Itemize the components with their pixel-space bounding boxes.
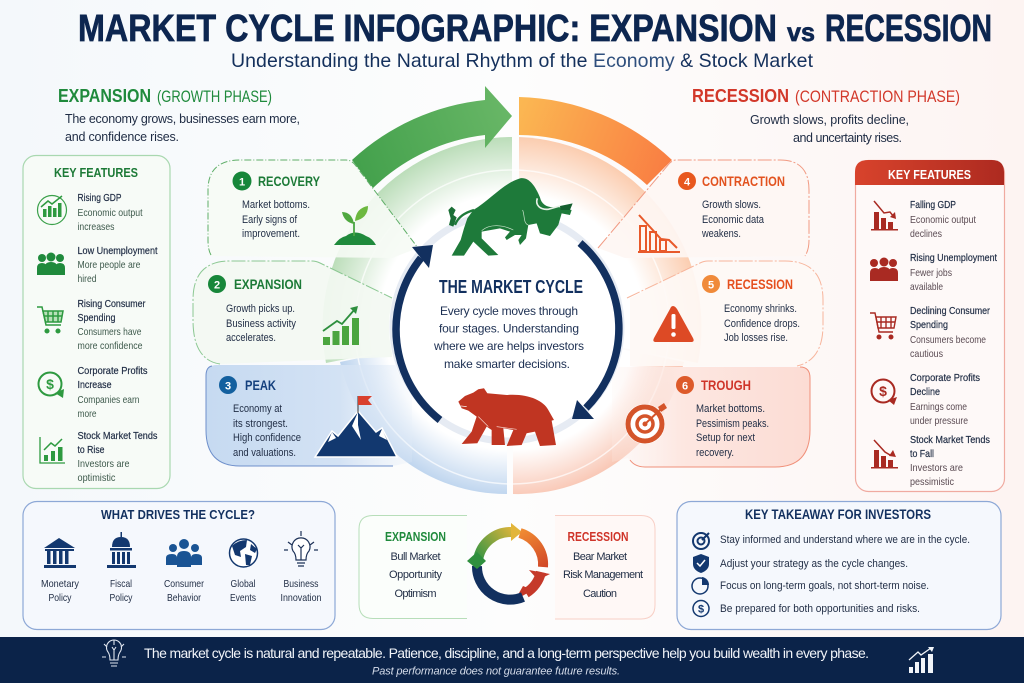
text: rising unemployment	[910, 252, 997, 293]
text: corporate profits decline: Corporate Profits	[910, 372, 980, 384]
text: recession body: Economy shrinks.	[724, 303, 797, 315]
text: falling gdp: Economic output	[910, 214, 976, 226]
icon: target	[625, 403, 667, 444]
icon: dollar coin	[693, 600, 709, 616]
text: corporate profits increase	[78, 365, 148, 420]
arc: orange contraction band	[519, 97, 672, 185]
icon: footer chart	[909, 647, 934, 673]
icon: globe	[230, 539, 258, 567]
subtitle: Understanding the Natural Rhythm of the Economy & Stock Market	[231, 50, 814, 72]
icon: footer lightbulb	[102, 640, 126, 666]
text: recession body: Confidence drops.	[724, 318, 800, 330]
heading: expansion phase: (GROWTH PHASE)	[157, 88, 272, 106]
icon: people	[870, 258, 898, 281]
panel: expansion vs recession summary	[359, 516, 655, 619]
text: be prepared: Be prepared for both opportunities and risks.	[720, 603, 920, 615]
panel: recovery card	[208, 160, 418, 258]
icon: warning triangle	[653, 306, 694, 342]
text: rising gdp: increases	[78, 221, 114, 233]
center disc	[389, 209, 625, 445]
text: consumer behavior	[164, 578, 204, 604]
text: market cycle description: make smarter decisions.	[444, 357, 570, 371]
text: rising gdp	[78, 192, 143, 233]
badge: 5	[702, 275, 720, 293]
icon: mountain with flag	[315, 396, 397, 457]
text: global events: Global	[230, 578, 256, 590]
text: declining consumer spending: Declining Consumer	[910, 305, 990, 317]
icon: shield	[693, 554, 709, 573]
text: stock market fall	[910, 434, 990, 488]
text: business innovation: Business	[284, 578, 318, 590]
icon: rising gdp	[38, 196, 66, 224]
panel: recession card	[627, 261, 823, 366]
icon: consumers	[166, 539, 202, 567]
text: consumer behavior: Behavior	[167, 592, 201, 604]
badge: 1	[232, 172, 252, 190]
text: fiscal policy	[110, 578, 133, 604]
text: rising gdp: Rising GDP	[78, 192, 122, 204]
panel: key features recession	[855, 160, 1004, 492]
heading: recession phase: (CONTRACTION PHASE)	[795, 88, 960, 106]
text: stock market rise: optimistic	[78, 472, 116, 484]
text: expansion body: Growth picks up.	[226, 303, 295, 315]
icon: falling gdp	[871, 201, 898, 230]
badge: 6	[676, 376, 694, 394]
text: declining consumer spending: Spending	[910, 319, 948, 331]
heading: trough: TROUGH	[701, 377, 751, 393]
wheel: fading wedges	[323, 137, 701, 494]
text: stock market rise: Investors are	[78, 458, 130, 470]
text: rising consumer spending: Consumers have	[78, 326, 142, 338]
text: recession description	[750, 113, 909, 145]
text: expansion column: Opportunity	[389, 569, 442, 581]
text: rising consumer spending	[78, 298, 146, 352]
icon: people	[37, 252, 65, 275]
badge: 3: 3	[225, 380, 231, 392]
text: recovery body: improvement.	[242, 228, 300, 240]
text: market cycle description: four stages. Understanding	[439, 322, 579, 336]
panel: key takeaway for investors	[677, 502, 1001, 630]
text: expansion column	[385, 529, 446, 600]
text: focus on goals: Focus on long-term goals, not short-term noise.	[720, 580, 929, 592]
text: peak body: and valuations.	[233, 447, 296, 459]
text: rising gdp: Economic output	[78, 207, 143, 219]
panel: contraction card	[598, 160, 809, 258]
text: peak body: Economy at	[233, 403, 282, 415]
text: consumer behavior: Consumer	[164, 578, 204, 590]
text: market cycle description: Every cycle moves through	[440, 304, 578, 318]
icon: cart	[870, 313, 896, 339]
text: recession column: Risk Management	[563, 569, 643, 581]
icon: bull	[448, 178, 573, 256]
heading: recession: RECESSION	[727, 276, 793, 292]
text: low unemployment: Low Unemployment	[78, 245, 158, 257]
badge: 3	[219, 376, 237, 394]
text: expansion column: EXPANSION	[385, 529, 446, 544]
badge: 6: 6	[682, 380, 688, 392]
text: recession column: RECESSION	[568, 529, 628, 544]
heading: expansion phase: EXPANSION	[58, 86, 151, 106]
icon: target	[693, 533, 709, 549]
icon: bank	[44, 538, 76, 568]
text: stock market fall: to Fall	[910, 448, 934, 460]
text: corporate profits increase: Corporate Profits	[78, 365, 148, 377]
badge: 4: 4	[684, 176, 691, 188]
text: low unemployment	[78, 245, 158, 285]
text: monetary policy: Policy	[48, 592, 72, 604]
text: expansion column: Bull Market	[390, 551, 440, 563]
title: vs	[787, 17, 815, 47]
text: recession column	[563, 529, 643, 600]
heading: expansion: EXPANSION	[234, 276, 302, 292]
title: MARKET CYCLE INFOGRAPHIC: EXPANSION	[78, 8, 777, 50]
badge: 1: 1	[239, 176, 245, 188]
text: recession body	[724, 303, 800, 344]
text: recovery body: Early signs of	[242, 214, 298, 226]
text: declining consumer spending	[910, 305, 990, 360]
icon: cycle arrows	[467, 523, 550, 600]
text: fiscal policy: Fiscal	[110, 578, 132, 590]
text: expansion description	[65, 112, 300, 144]
text: corporate profits decline	[910, 372, 980, 427]
text: trough body: recovery.	[696, 447, 734, 459]
heading: peak: PEAK	[245, 377, 276, 393]
text: recovery body: Market bottoms.	[242, 199, 310, 211]
text: declining consumer spending: Consumers become	[910, 334, 986, 346]
panel: trough card	[612, 367, 810, 467]
icon: cart	[37, 307, 63, 333]
text: stock market fall: Investors are	[910, 462, 963, 474]
text: expansion column: Optimism	[394, 588, 436, 600]
heading: key features: KEY FEATURES	[54, 165, 138, 180]
badge: 2	[208, 275, 226, 293]
text: peak body: High confidence	[233, 432, 301, 444]
text: peak body: its strongest.	[233, 418, 288, 430]
text: stay informed: Stay informed and understand where we are in the cycle.	[720, 534, 970, 546]
text: expansion body: Business activity	[226, 318, 297, 330]
heading: contraction: CONTRACTION	[702, 173, 785, 189]
badge: 4	[678, 172, 696, 190]
text: corporate profits decline: under pressure	[910, 415, 968, 427]
panel: peak card	[206, 365, 412, 466]
icon: dollar profits: $	[46, 376, 54, 392]
text: stock market fall: pessimistic	[910, 476, 954, 488]
text: recession description: and uncertainty rises.	[793, 131, 902, 145]
text: falling gdp: Falling GDP	[910, 199, 956, 211]
icon: lightbulb	[284, 531, 318, 566]
text: trough body: Setup for next	[696, 432, 755, 444]
text: rising consumer spending: Rising Consumer	[78, 298, 146, 310]
text: monetary policy	[41, 578, 80, 604]
icon: dollar profits	[38, 372, 64, 398]
text: recession column: Caution	[583, 588, 617, 600]
text: stock market fall: Stock Market Tends	[910, 434, 990, 446]
icon: dollar coin: $	[698, 604, 704, 616]
text: expansion description: The economy grows, businesses earn more,	[65, 112, 300, 126]
text: trough body: Pessimism peaks.	[696, 418, 769, 430]
panel: key features expansion	[23, 156, 170, 488]
text: rising unemployment: Rising Unemployment	[910, 252, 997, 264]
text: expansion body	[226, 303, 297, 344]
panel: expansion card	[193, 261, 392, 364]
icon: sprout	[334, 206, 376, 245]
footer banner	[0, 637, 1024, 683]
icon: dollar decline	[872, 380, 897, 405]
icon: pie chart	[692, 577, 709, 594]
text: corporate profits increase: more	[78, 408, 97, 420]
text: market cycle description: where we are helps investors	[433, 339, 584, 353]
text: adjust strategy: Adjust your strategy as the cycle changes.	[720, 558, 908, 570]
heading: recession phase: RECESSION	[692, 86, 789, 106]
text: footer message: The market cycle is natural and repeatable. Patience, discipline, and a long-term perspective help you build wealth in every phase.	[144, 645, 869, 661]
header: key features	[855, 160, 1004, 185]
heading: key takeaway: KEY TAKEAWAY FOR INVESTORS	[745, 507, 931, 522]
text: contraction body	[701, 199, 764, 240]
icon: capitol	[107, 532, 136, 568]
text: corporate profits decline: Earnings come	[910, 401, 967, 413]
text: expansion description: and confidence rises.	[65, 130, 179, 144]
icon: bear	[458, 388, 556, 446]
badge: 2: 2	[214, 280, 220, 292]
panel: what drives the cycle	[23, 502, 335, 630]
badge: 5: 5	[708, 280, 714, 292]
text: global events: Events	[230, 592, 256, 604]
icon: stock chart up	[40, 437, 65, 463]
icon: stock chart down	[871, 440, 898, 468]
text: rising consumer spending: Spending	[78, 312, 116, 324]
text: contraction body: weakens.	[701, 228, 741, 240]
text: business innovation	[280, 578, 322, 604]
text: global events	[230, 578, 256, 604]
text: contraction body: Economic data	[702, 214, 764, 226]
text: declining consumer spending: cautious	[910, 348, 943, 360]
text: falling gdp	[910, 199, 976, 240]
icon: growth chart	[323, 306, 359, 345]
text: monetary policy: Monetary	[41, 578, 80, 590]
ring: market cycle arrows	[393, 213, 621, 441]
heading: what drives the cycle: WHAT DRIVES THE CYCLE?	[101, 507, 255, 522]
text: rising unemployment: available	[910, 281, 943, 293]
text: recession description: Growth slows, profits decline,	[750, 113, 909, 127]
icon: dollar decline: $	[879, 383, 887, 399]
text: trough body: Market bottoms.	[696, 403, 765, 415]
text: rising unemployment: Fewer jobs	[910, 267, 952, 279]
text: contraction body: Growth slows.	[702, 199, 761, 211]
heading: the market cycle: THE MARKET CYCLE	[439, 277, 583, 297]
arrow: green expansion band	[352, 86, 512, 188]
text: falling gdp: declines	[910, 228, 942, 240]
text: recovery body	[242, 199, 310, 240]
text: stock market rise: Stock Market Tends	[78, 430, 158, 442]
text: recession body: Job losses rise.	[724, 332, 788, 344]
text: footer disclaimer: Past performance does not guarantee future results.	[372, 666, 620, 678]
text: low unemployment: More people are	[78, 259, 141, 271]
text: stock market rise	[78, 430, 158, 484]
heading: recession phase	[692, 86, 960, 106]
text: market cycle description	[433, 304, 584, 371]
text: fiscal policy: Policy	[110, 592, 133, 604]
header: key features: KEY FEATURES	[888, 167, 971, 182]
text: recession column: Bear Market	[573, 551, 627, 563]
text: corporate profits increase: Companies earn	[78, 394, 140, 406]
text: peak body	[233, 403, 301, 459]
text: trough body	[696, 403, 769, 459]
text: business innovation: Innovation	[280, 592, 322, 604]
icon: falling chart	[638, 215, 680, 252]
heading: recovery: RECOVERY	[258, 173, 321, 189]
text: corporate profits decline: Decline	[910, 386, 940, 398]
heading: expansion phase	[58, 86, 272, 106]
text: low unemployment: hired	[78, 273, 97, 285]
text: stock market rise: to Rise	[78, 444, 105, 456]
text: corporate profits increase: Increase	[78, 379, 112, 391]
text: rising consumer spending: more confidence	[78, 340, 143, 352]
text: expansion body: accelerates.	[226, 332, 276, 344]
